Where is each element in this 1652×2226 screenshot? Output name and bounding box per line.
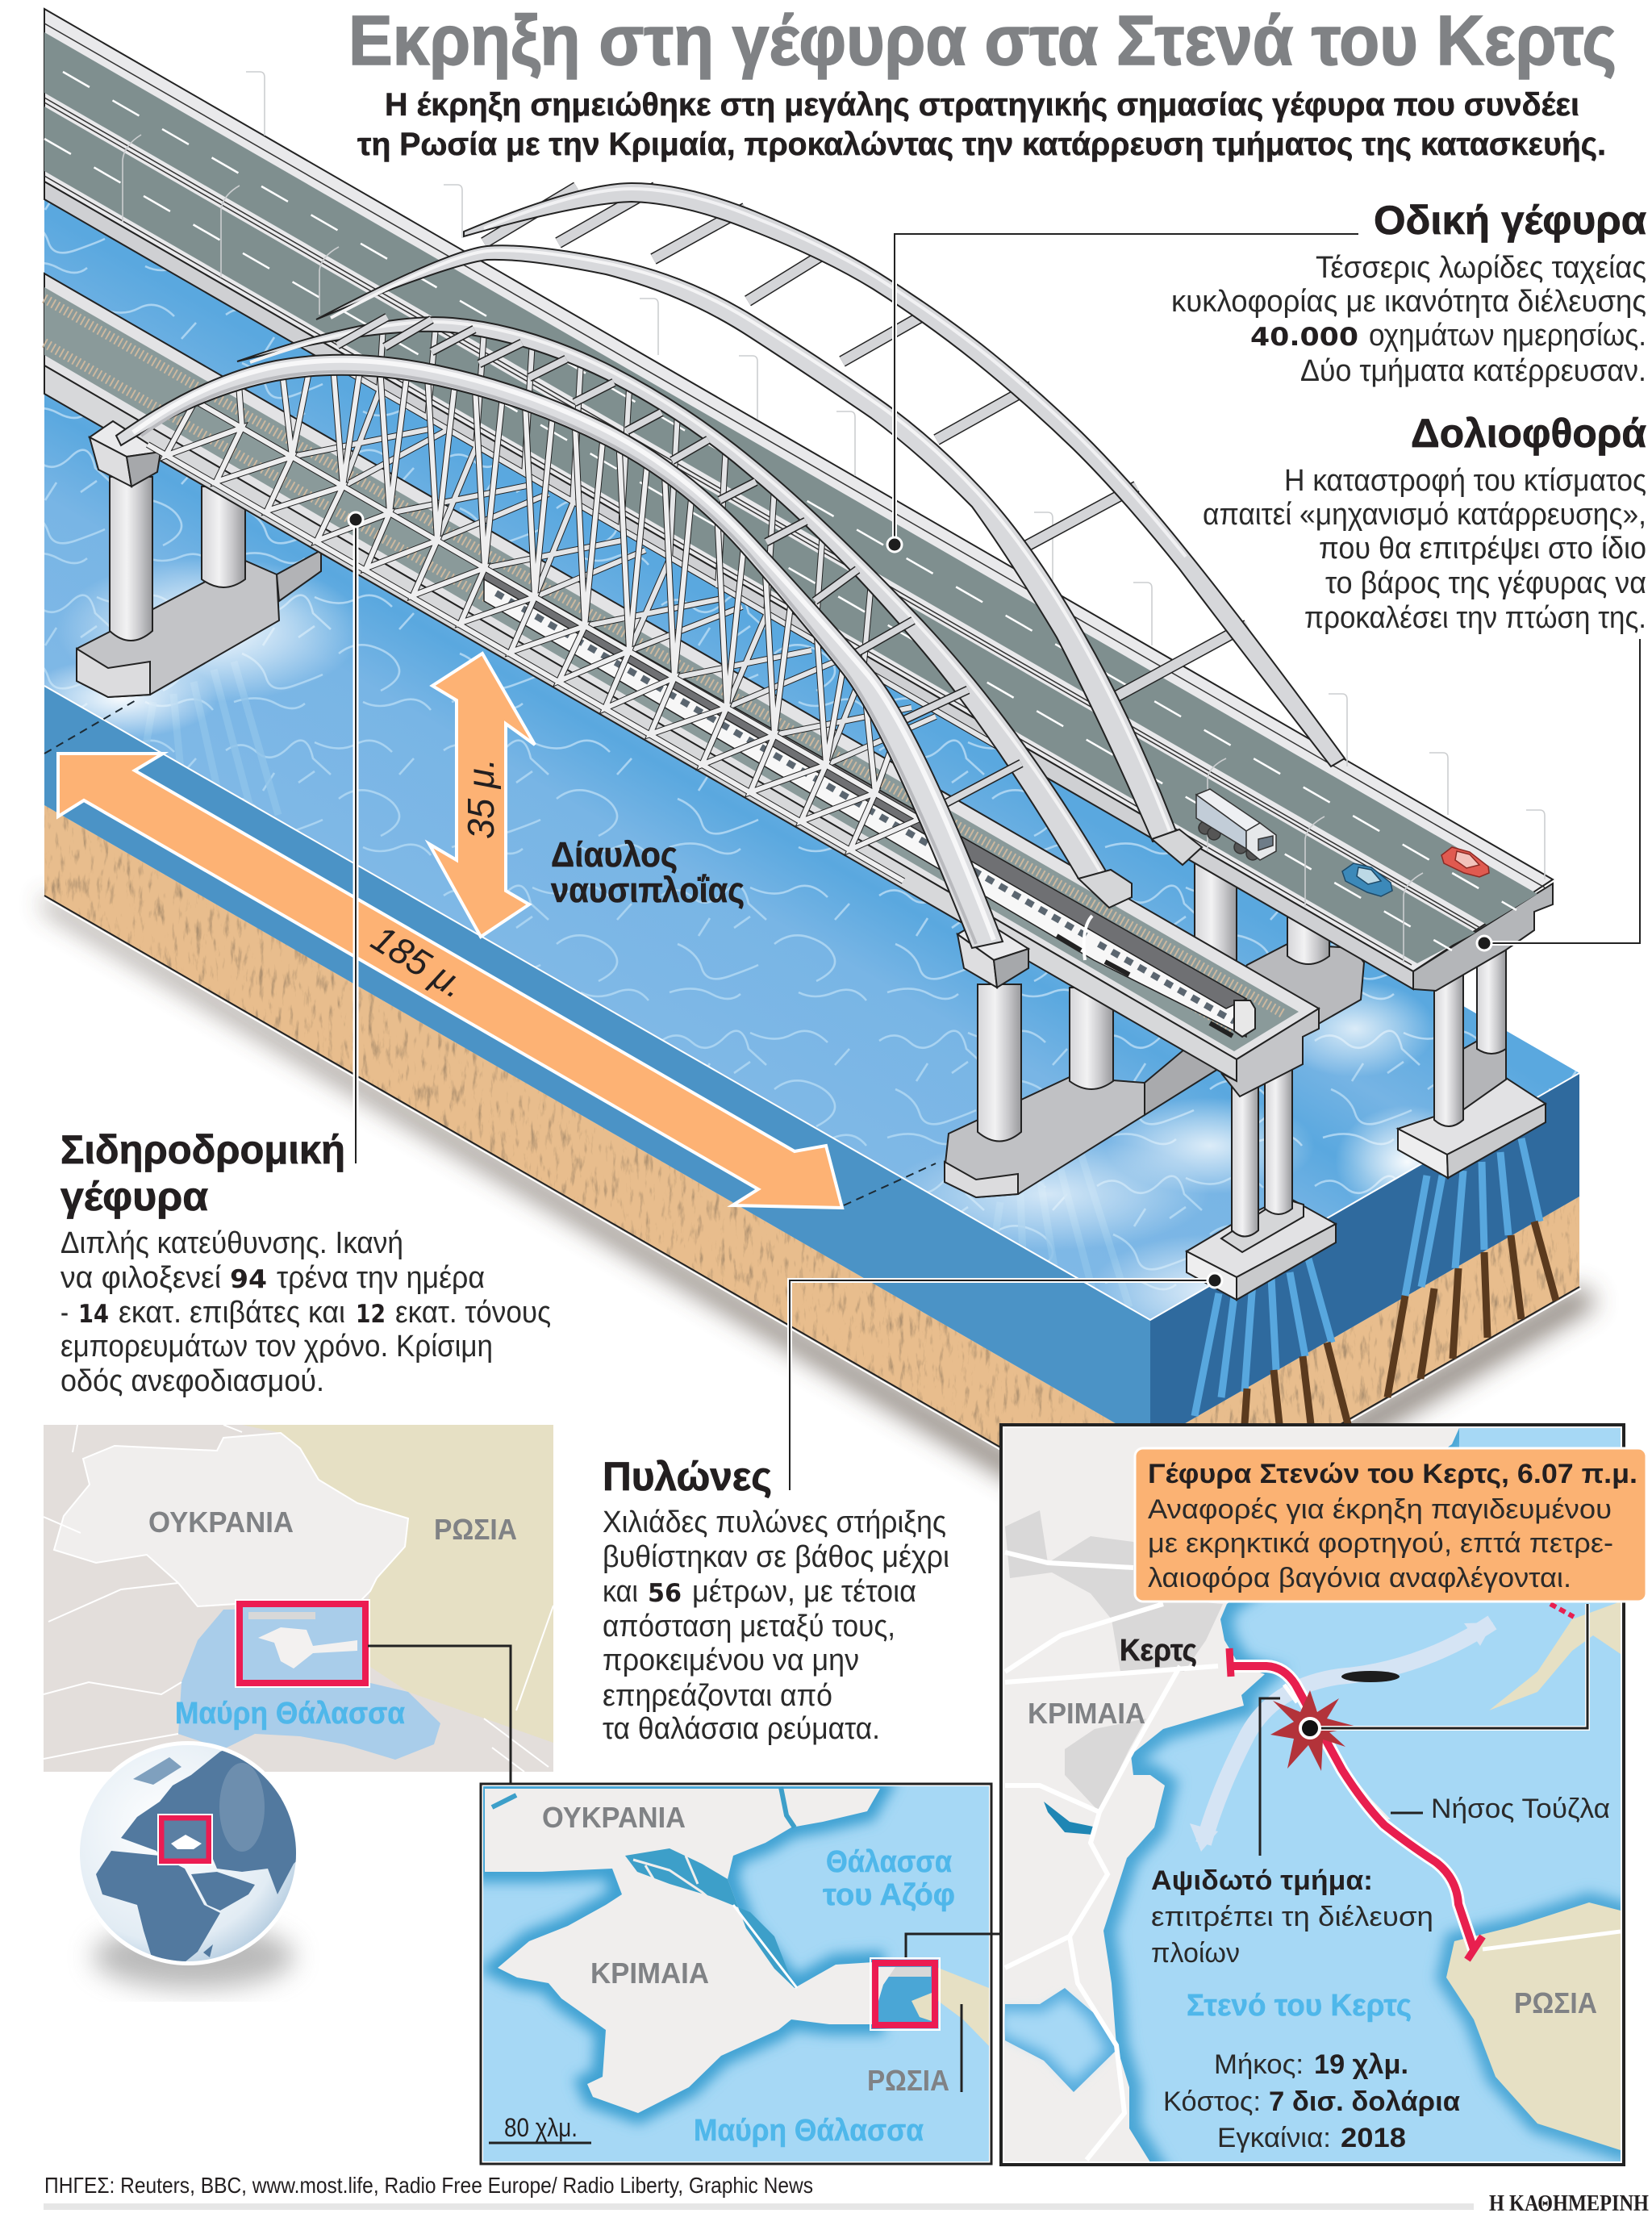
road end pier footing (1398, 1078, 1546, 1155)
inland bay shading (1005, 1988, 1116, 2092)
label: Black Sea: Μαύρη Θάλασσα (175, 1697, 405, 1731)
urban area south (1065, 1719, 1146, 1812)
Crimean land (1004, 1428, 1459, 2162)
map: region overview (44, 1425, 553, 1772)
rail dash (1550, 1604, 1574, 1617)
callout: explosion report: Αναφορές για έκρηξη παγιδευμένου (1148, 1494, 1612, 1525)
label: Kerch: Κερτς (1120, 1634, 1197, 1668)
Azov corner (1459, 1428, 1621, 1448)
label: Ukraine: ΟΥΚΡΑΝΙΑ (542, 1801, 686, 1834)
train front (1234, 1000, 1255, 1037)
label: Azov sea (823, 1845, 955, 1912)
pile streaks and glows on the surface (24, 557, 1480, 1347)
Taman spit (1489, 1602, 1621, 1710)
label: Russia: ΡΩΣΙΑ (867, 2064, 949, 2097)
deck side face (44, 182, 1413, 989)
text block: pylons: προκειμένου να μην (603, 1643, 859, 1677)
middle rail pier front column (978, 984, 1021, 1141)
text block: pylons: και (603, 1575, 638, 1609)
leader: railway bridge (348, 512, 363, 1163)
Ukraine land (54, 1433, 408, 1606)
rear truss (292, 326, 1000, 765)
water right face (1150, 1073, 1579, 1443)
text block: pylons: επηρεάζονται από (603, 1679, 832, 1713)
Arabat spit (733, 1905, 797, 1988)
lake (1044, 1802, 1097, 1835)
text block: railway bridge: 94 (230, 1265, 267, 1294)
inland bay (1000, 1998, 1107, 2082)
footer bar (44, 2203, 1474, 2210)
callout: explosion report: λαιοφόρα βαγόνια αναφλέγονται. (1148, 1563, 1571, 1593)
label: navigation channel: ναυσιπλοΐας (551, 871, 745, 910)
northern landmass (133, 1757, 181, 1785)
bridge facts: 19 χλμ. (1314, 2049, 1408, 2080)
bridge facts: 7 δισ. δολάρια (1269, 2086, 1460, 2117)
text block: railway bridge: τρένα την ημέρα (277, 1261, 485, 1295)
Russia land shading (1446, 1902, 1621, 2150)
text block: railway bridge: εμπορευμάτων τον χρόνο. Κρίσιμη (60, 1330, 493, 1364)
text block: sabotage: Δολιοφθορά (1411, 411, 1646, 456)
Russia land (938, 1968, 992, 2049)
label: 35 μ.: 35 μ. (460, 758, 502, 839)
left rail pier cap (90, 421, 161, 487)
road bridge arch (316, 183, 1345, 865)
deck side (44, 365, 1237, 1081)
water surface (44, 187, 1579, 1320)
road end pier rear column (1477, 940, 1506, 1054)
text block: railway bridge: να φιλοξενεί (60, 1261, 222, 1295)
label: Azov sea: Θάλασσα (826, 1845, 952, 1879)
text block: railway bridge: Σιδηροδρομική (60, 1127, 345, 1172)
coast shading (1004, 1428, 1459, 2162)
bridge facts: 2018 (1341, 2123, 1406, 2153)
bridge facts: Μήκος: (1214, 2049, 1304, 2080)
Dnieper inlets (492, 1787, 795, 1827)
text block: railway bridge (60, 1127, 551, 1398)
text block: railway bridge: γέφυρα (60, 1174, 208, 1219)
label: Crimea: ΚΡΙΜΑΙΑ (590, 1957, 709, 1990)
middle rail pier extension and footing (1145, 1041, 1218, 1115)
sphere highlight (219, 1763, 265, 1852)
text block: pylons: τα θαλάσσια ρεύματα. (603, 1712, 880, 1746)
scale bar: 80 χλμ. (504, 2113, 578, 2142)
seabed soil (44, 805, 1581, 1536)
rear arch foot (1078, 870, 1132, 908)
text block: pylons: μέτρων, με τέτοια (692, 1575, 916, 1609)
ballast strip (44, 287, 1299, 1051)
blue car (1342, 863, 1392, 896)
train (484, 565, 1255, 1037)
callout: explosion report: Γέφυρα Στενών του Κερτς, 6.07 π.μ. (1148, 1459, 1637, 1489)
leader: pylons (790, 1273, 1222, 1490)
leader: Tuzla (1391, 1812, 1423, 1814)
subtitle: τη Ρωσία με την Κριμαία, προκαλώντας την κατάρρευση τμήματος της κατασκευής. (357, 127, 1606, 162)
label: arched section: πλοίων (1151, 1938, 1240, 1969)
Russia land (242, 1425, 553, 1743)
callout: explosion report: με εκρηκτικά φορτηγού, επτά πετρε- (1148, 1528, 1613, 1559)
label: Ukraine: ΟΥΚΡΑΝΙΑ (148, 1506, 294, 1539)
bogies (1057, 936, 1233, 1036)
Tuzla island (1339, 1759, 1391, 1819)
Russian road (1483, 1932, 1621, 1949)
Arabia (191, 1872, 255, 1911)
text block: road bridge: Οδική γέφυρα (1374, 198, 1646, 243)
piles in seabed (1245, 1222, 1556, 1424)
connector: Crimea map to Kerch map (906, 1934, 1001, 1957)
globe (76, 1741, 311, 1989)
text block: railway bridge: 14 (78, 1300, 109, 1329)
subtitle (357, 87, 1606, 162)
road mid pier columns (1195, 855, 1237, 968)
near truss (148, 365, 928, 881)
label: arched section: Αψιδωτό τμήμα: (1151, 1865, 1373, 1896)
text block: sabotage (1203, 411, 1646, 635)
label: navigation channel (551, 835, 745, 910)
top ties (337, 317, 1021, 805)
globe shadow (93, 1924, 294, 1989)
leader: arched section (1260, 1698, 1280, 1856)
label: Tuzla island: Νήσος Τούζλα (1431, 1794, 1610, 1824)
label: 185 μ.: 185 μ. (365, 917, 473, 1006)
left pier front column (110, 477, 152, 641)
globe locator (158, 1815, 212, 1865)
text block: pylons (603, 1454, 949, 1746)
middle rail pier rear column (1070, 988, 1113, 1089)
map: Kerch strait (1000, 1425, 1646, 2165)
road end pier wall (1454, 1025, 1506, 1117)
label: arched section: επιτρέπει τη διέλευση (1151, 1902, 1433, 1932)
road bridge piers (1194, 855, 1546, 1178)
barriers (44, 23, 1545, 965)
carriage windows (496, 593, 1234, 1021)
road arch rear rib (464, 183, 1345, 766)
channel dashed limits (44, 700, 936, 1205)
ballast dots (44, 299, 1283, 1029)
text block: railway bridge: οδός ανεφοδιασμού. (60, 1364, 324, 1398)
explosion (1270, 1690, 1357, 1771)
front rail pier footing (1187, 1197, 1336, 1277)
label: Azov sea: του Αζόφ (823, 1878, 955, 1912)
railway bridge deck (44, 274, 1319, 1096)
urban area Kerch (1005, 1510, 1223, 1672)
middle rail pier cap (957, 920, 1028, 988)
label: Black Sea: Μαύρη Θάλασσα (694, 2114, 924, 2148)
text block: railway bridge: εκατ. τόνους (395, 1296, 551, 1330)
lagoon islets (633, 1856, 730, 1916)
deck surface (44, 274, 1319, 1059)
text block: road bridge (1171, 198, 1646, 388)
Eurasia (121, 1751, 296, 1894)
label: Crimea: ΚΡΙΜΑΙΑ (1028, 1697, 1145, 1730)
bridge facts (1163, 2049, 1460, 2153)
carriage gap (1084, 916, 1092, 960)
label: Russia: ΡΩΣΙΑ (434, 1513, 517, 1546)
callout: explosion report (1135, 1448, 1646, 1602)
label: arched section (1151, 1865, 1433, 1969)
leader: road bridge deck end (1477, 639, 1640, 950)
lane 1 (44, 32, 1537, 925)
locator box strait (870, 1958, 940, 2030)
red car (1441, 847, 1489, 877)
locator box (236, 1600, 369, 1687)
text block: pylons: βυθίστηκαν σε βάθος μέχρι (603, 1540, 949, 1574)
rail arch near rib (116, 355, 1003, 948)
leader: road bridge (887, 234, 1358, 552)
text block: road bridge: κυκλοφορίας με ικανότητα διέλευσης (1171, 285, 1646, 319)
cross-section of strait: seabed, water and surface (24, 187, 1597, 1561)
roads (1005, 1552, 1218, 2160)
surface ripples (44, 187, 1579, 1320)
text block: railway bridge: εκατ. επιβάτες και (119, 1296, 345, 1330)
road end pier front column (1434, 972, 1463, 1126)
deck outer surface (44, 9, 1553, 971)
label: navigation channel: Δίαυλος (551, 835, 678, 875)
text block: railway bridge: Διπλής κατεύθυνσης. Ικανή (60, 1226, 403, 1260)
carriages roof (484, 565, 1246, 1009)
text block: pylons: απόσταση μεταξύ τους, (603, 1610, 895, 1643)
Madagascar (203, 1944, 213, 1957)
bridge facts: Εγκαίνια: (1217, 2123, 1331, 2153)
text block: pylons: 56 (648, 1579, 682, 1608)
Crimea and mainland (485, 1789, 880, 2113)
text block: pylons: Πυλώνες (603, 1454, 772, 1499)
bridge facts: Κόστος: (1163, 2086, 1261, 2117)
lane arrowheads (1464, 1623, 1493, 1646)
ship (1341, 1671, 1400, 1682)
railway bridge piers (77, 477, 1336, 1300)
submerged piles, right face (1195, 1138, 1540, 1416)
label: Kerch strait: Στενό του Κερτς (1187, 1989, 1412, 2023)
subtitle: Η έκρηξη σημειώθηκε στη μεγάλης στρατηγικής σημασίας γέφυρα που συνδέει (385, 87, 1579, 123)
text block: railway bridge: 12 (356, 1300, 386, 1329)
road arch cross ties (484, 187, 1247, 700)
Africa (96, 1851, 220, 1962)
deck end face (1413, 883, 1553, 991)
carriages body (484, 565, 1246, 1037)
road bridge deck (44, 9, 1553, 991)
railway arch truss (116, 317, 1132, 948)
label: Russia: ΡΩΣΙΑ (1514, 1986, 1597, 2019)
road mid pier footing (1194, 944, 1364, 1041)
lane 2 (44, 106, 1475, 963)
Black Sea (178, 1606, 440, 1760)
left pier rear column (202, 487, 245, 587)
map: Crimea (481, 1784, 992, 2164)
text block: pylons: Χιλιάδες πυλώνες στήριξης (603, 1506, 946, 1539)
connector: overview to Crimea map (368, 1646, 511, 1783)
sources: ΠΗΓΕΣ: Reuters, BBC, www.most.life, Radio Free Europe/ Radio Liberty, Graphic News (44, 2173, 813, 2198)
text block: railway bridge: - (60, 1296, 69, 1330)
arrow: channel height 35 m (429, 654, 535, 937)
vehicles on road bridge (1196, 789, 1489, 896)
water front face (44, 686, 1150, 1443)
explosion marker and leader (1300, 1604, 1587, 1738)
front rail pier columns (1265, 1069, 1292, 1214)
truck (1196, 789, 1276, 860)
Russia land (1446, 1902, 1621, 2150)
shipping lanes (1204, 1623, 1492, 1844)
text block: road bridge: Τέσσερις λωρίδες ταχείας (1316, 251, 1646, 285)
left pier extension and footing (277, 550, 321, 601)
Sivash lagoons (625, 1848, 795, 1988)
ground shadow (44, 896, 1597, 1561)
coastal shading (485, 1789, 880, 2113)
lane markings (44, 72, 1516, 950)
road arch front rib (316, 245, 1179, 842)
rail arch rear rib (237, 317, 1111, 879)
borders (44, 1425, 553, 1772)
leader to Russia label (960, 2004, 963, 2092)
text block: road bridge: 40.000 (1250, 323, 1358, 352)
arrow: channel width 185 m (58, 754, 842, 1208)
deck end and pier cap (1221, 1009, 1319, 1096)
bridge route (1229, 1648, 1483, 1960)
road lamps (123, 72, 1545, 963)
road arch foot (1152, 829, 1202, 865)
